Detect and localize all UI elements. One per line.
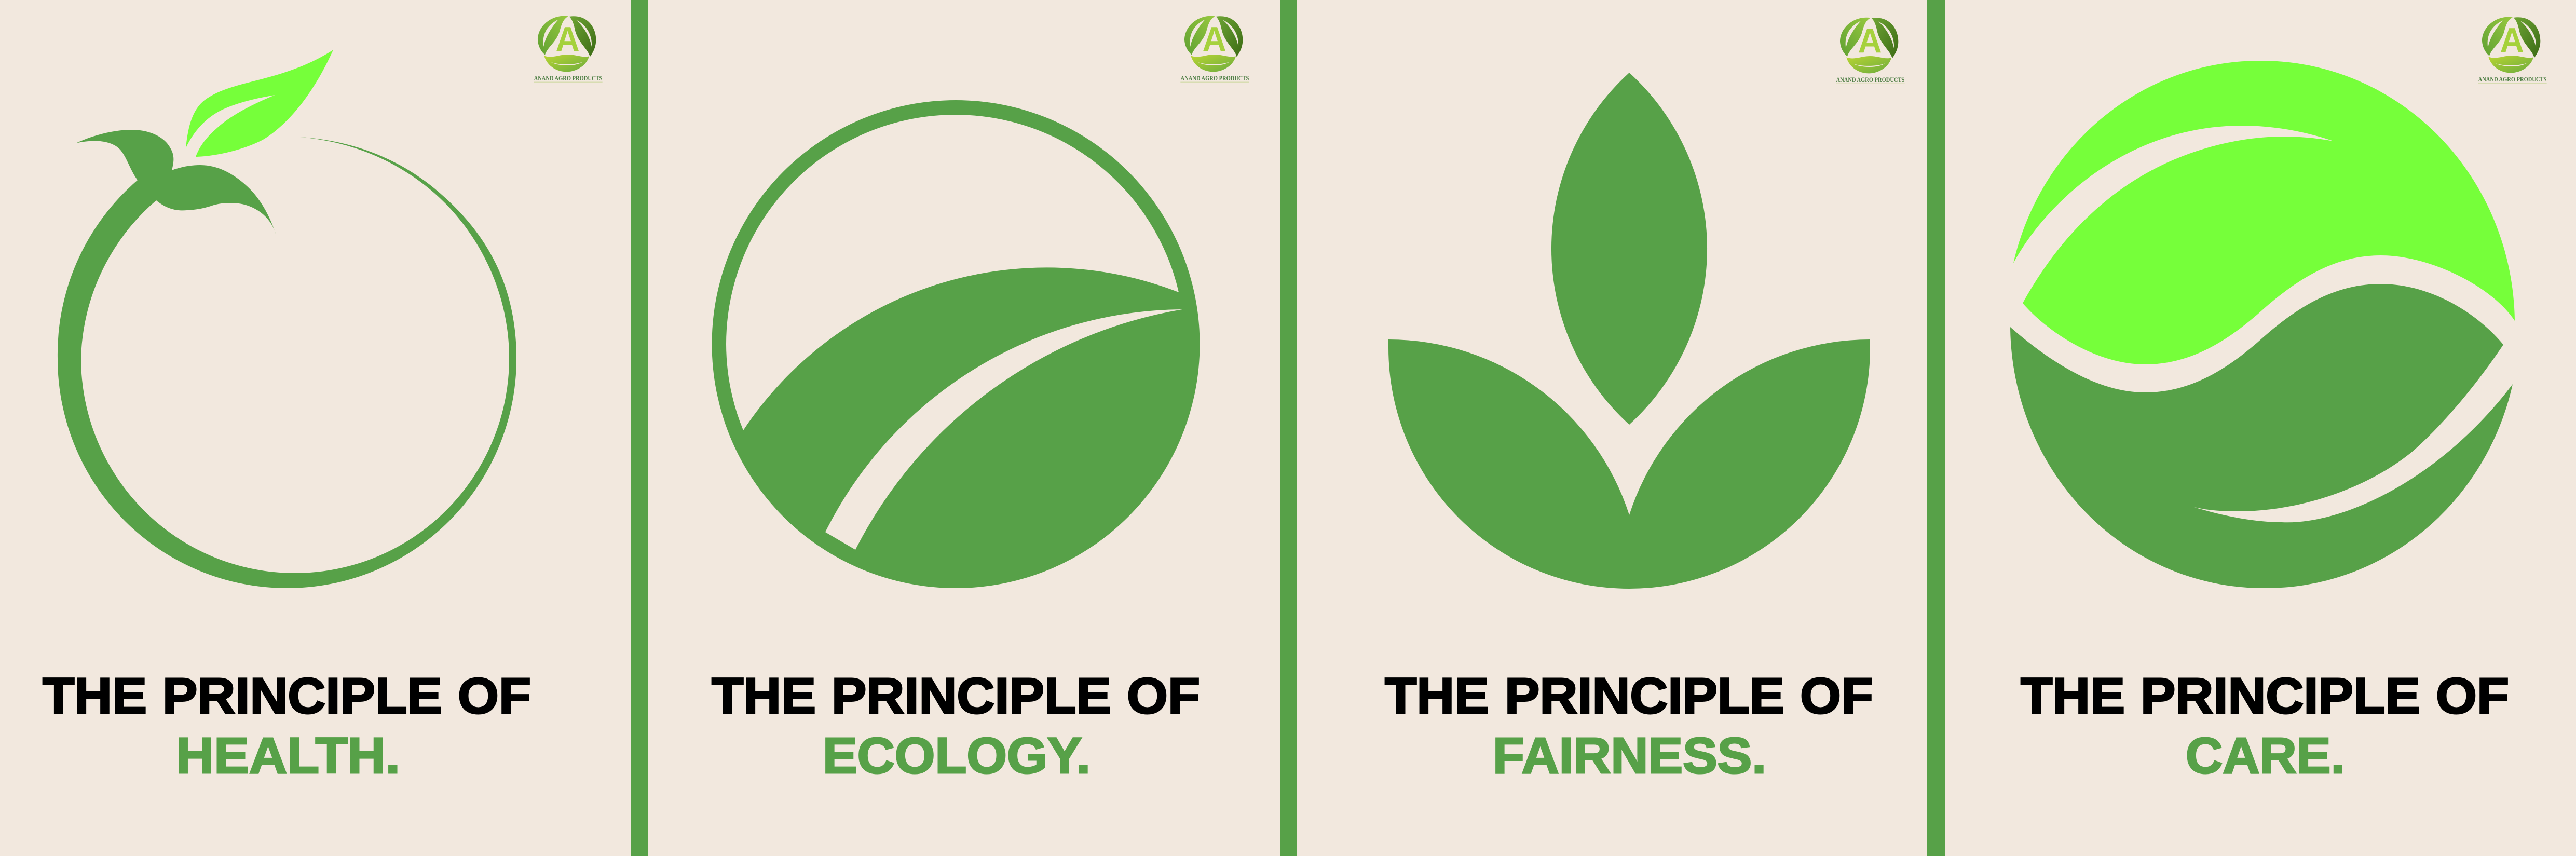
icon: lime leaf xyxy=(186,50,333,157)
panel: fairness xyxy=(1297,0,1927,856)
heading: the principle of ecology: ECOLOGY. xyxy=(823,727,1091,784)
logo: Anand Agro Products xyxy=(1180,16,1249,83)
logo: Anand Agro Products: ANAND AGRO PRODUCTS xyxy=(534,75,602,82)
heading: the principle of health xyxy=(43,668,531,784)
heading: the principle of health: OF xyxy=(458,668,531,724)
panel: ecology xyxy=(648,0,1280,856)
logo: Anand Agro Products: ANAND AGRO PRODUCTS xyxy=(2478,76,2546,83)
icon: three leaves xyxy=(1388,73,1870,589)
heading: the principle of health: THE xyxy=(43,668,147,724)
heading: the principle of care: THE xyxy=(2021,668,2125,724)
heading: the principle of fairness: PRINCIPLE xyxy=(1505,668,1784,724)
heading: the principle of fairness: FAIRNESS. xyxy=(1493,727,1766,784)
heading: the principle of ecology: PRINCIPLE xyxy=(832,668,1111,724)
logo: Anand Agro Products: ANAND AGRO PRODUCTS xyxy=(1836,76,1904,84)
heading: the principle of care xyxy=(2021,668,2509,784)
panel: health xyxy=(0,0,631,856)
heading: the principle of fairness xyxy=(1385,668,1873,784)
icon: apple outline with dark leaves xyxy=(58,130,516,588)
logo: Anand Agro Products: A xyxy=(556,20,580,59)
heading: the principle of ecology xyxy=(712,668,1200,784)
heading: the principle of health: HEALTH. xyxy=(176,727,400,784)
logo: Anand Agro Products xyxy=(1836,18,1905,84)
heading: the principle of care: PRINCIPLE xyxy=(2141,668,2420,724)
heading: the principle of care: OF xyxy=(2436,668,2509,724)
heading: the principle of fairness: THE xyxy=(1385,668,1489,724)
icon: leaf in circle xyxy=(712,100,1200,588)
heading: the principle of ecology: THE xyxy=(712,668,816,724)
logo: Anand Agro Products: A xyxy=(1203,20,1226,59)
icon: two interlocking leaves xyxy=(2010,61,2515,588)
panel: care xyxy=(1945,0,2576,856)
logo: Anand Agro Products xyxy=(534,16,603,83)
logo: Anand Agro Products: A xyxy=(1858,22,1882,60)
heading: the principle of health: PRINCIPLE xyxy=(162,668,442,724)
logo: Anand Agro Products xyxy=(2478,17,2547,84)
heading: the principle of fairness: OF xyxy=(1800,668,1873,724)
logo: Anand Agro Products: ANAND AGRO PRODUCTS xyxy=(1181,75,1249,82)
logo: Anand Agro Products: A xyxy=(2500,21,2524,60)
heading: the principle of ecology: OF xyxy=(1127,668,1200,724)
heading: the principle of care: CARE. xyxy=(2186,727,2345,784)
